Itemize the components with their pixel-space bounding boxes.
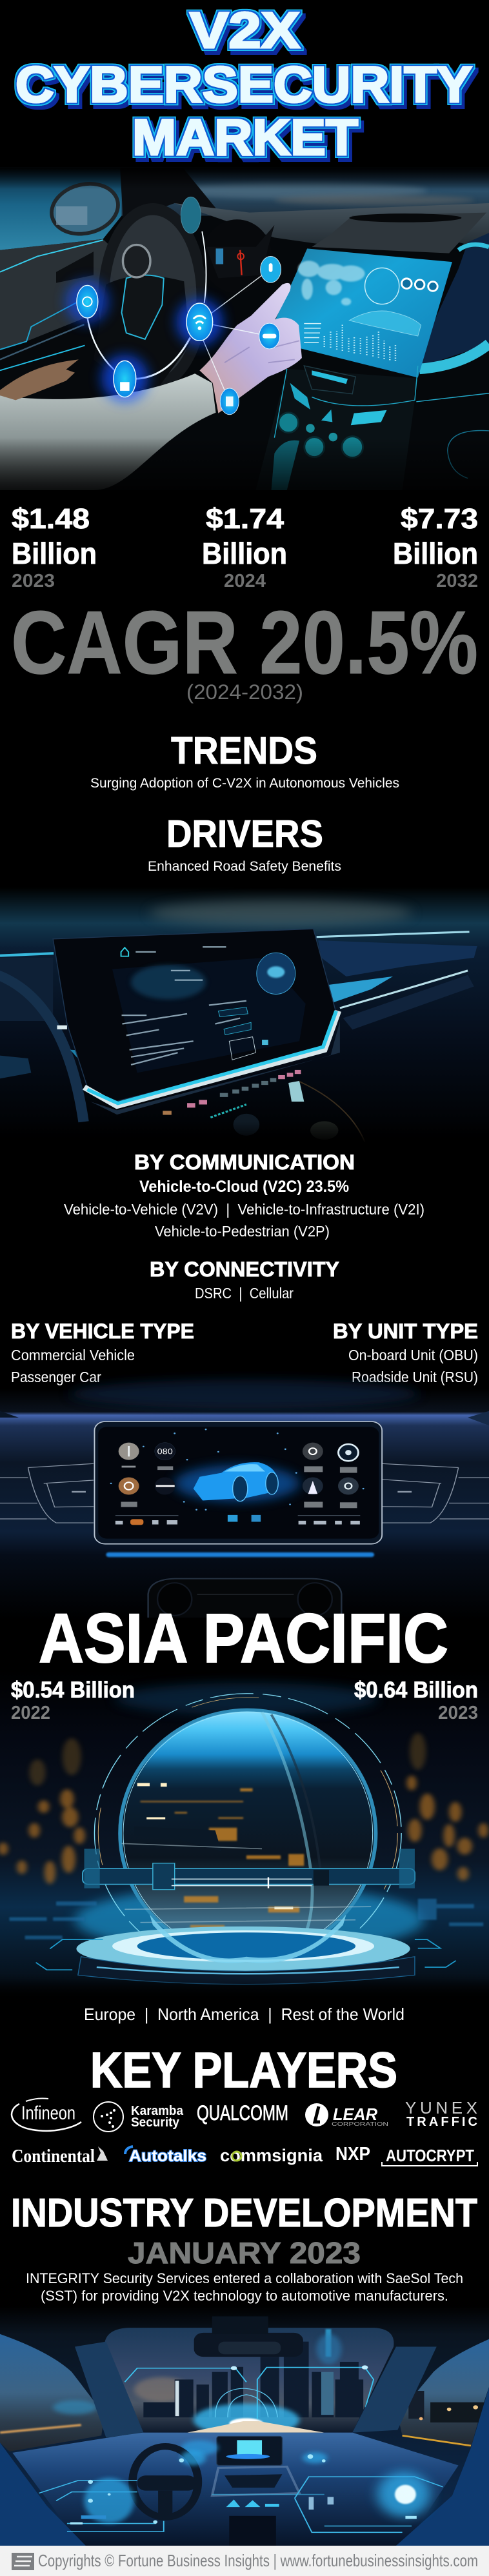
- logo: Yunex Traffic: TRAFFIC: [406, 2115, 477, 2129]
- Asia Pacific value 2022: $0.54 Billion: [11, 1678, 135, 1703]
- hero image: car cockpit with touch screen: [0, 167, 489, 490]
- logo: Infineon: [12, 2098, 81, 2131]
- trends: TRENDS: [171, 729, 317, 772]
- infotainment screen image: [0, 1380, 489, 1620]
- market size stat: 2032: Billion: [393, 537, 478, 570]
- Asia Pacific value 2023: [354, 1678, 478, 1723]
- drivers: [148, 813, 341, 874]
- logos row 2: [12, 2144, 477, 2166]
- logo: Commsignia: commsignia: [220, 2146, 323, 2165]
- development date: JANUARY 2023: [128, 2236, 361, 2270]
- region headline: ASIA PACIFIC: [39, 1599, 448, 1677]
- logo: Yunex Traffic: [405, 2098, 477, 2129]
- market size stat: 2023: $1.48: [12, 503, 90, 535]
- dashboard image with curved display: [0, 887, 489, 1144]
- segment: by unit type: On-board Unit (OBU): [348, 1347, 478, 1363]
- footer logo: [12, 2553, 34, 2570]
- logo: Yunex Traffic: YUNEX: [405, 2098, 477, 2117]
- Asia Pacific value 2023: 2023: [438, 1703, 478, 1723]
- development description: INTEGRITY Security Services entered a collaboration with SaeSol Tech: [26, 2270, 463, 2286]
- drivers: DRIVERS: [166, 813, 323, 855]
- car interior image with city view: [0, 2306, 489, 2546]
- segment: by communication: Vehicle-to-Vehicle (V2V) | Vehicle-to-Infrastructure (V2I): [64, 1201, 424, 1218]
- logos row 1: [12, 2098, 477, 2132]
- drivers: Enhanced Road Safety Benefits: [148, 859, 341, 874]
- market size stat: 2032: $7.73: [401, 503, 478, 535]
- segment: by communication: Vehicle-to-Cloud (V2C) 23.5%: [139, 1178, 349, 1196]
- Asia Pacific value 2023: $0.64 Billion: [354, 1678, 478, 1703]
- logo: Lear Corporation: LEAR: [333, 2105, 377, 2124]
- segment: by connectivity: BY CONNECTIVITY: [150, 1258, 339, 1281]
- network node icons: [66, 197, 281, 415]
- logo: Karamba Security: Security: [131, 2115, 180, 2130]
- logo: Karamba Security: [94, 2102, 184, 2132]
- segment: by connectivity: [150, 1258, 339, 1302]
- logo: Autotalks: Autotalks: [129, 2147, 206, 2165]
- segment: by vehicle type: Commercial Vehicle: [11, 1347, 135, 1363]
- title: MARKET: [132, 108, 358, 166]
- segment: by communication: [64, 1151, 424, 1240]
- other regions: Europe | North America | Rest of the World: [84, 2005, 404, 2024]
- market size stat: 2032: [393, 503, 478, 591]
- development description: [26, 2270, 463, 2304]
- logo: Qualcomm: QUALCOMM: [197, 2101, 288, 2125]
- market size stat: 2024: [202, 503, 287, 591]
- trends: [90, 729, 399, 791]
- segment: by unit type: Roadside Unit (RSU): [352, 1369, 478, 1385]
- logo: Autocrypt: AUTOCRYPT: [386, 2146, 474, 2165]
- Asia Pacific value 2022: 2022: [11, 1703, 50, 1723]
- development description: (SST) for providing V2X technology to automotive manufacturers.: [41, 2288, 448, 2304]
- title: [15, 1, 472, 166]
- key players heading: KEY PLAYERS: [90, 2043, 397, 2098]
- segment: by communication: BY COMMUNICATION: [134, 1151, 355, 1174]
- market size stat: 2032: 2032: [436, 571, 478, 591]
- market size stat: 2024: Billion: [202, 537, 287, 570]
- trends: Surging Adoption of C-V2X in Autonomous Vehicles: [90, 776, 399, 791]
- market size stat: 2023: [12, 503, 97, 591]
- market size stat: 2024: 2024: [224, 571, 266, 591]
- segment: by vehicle type: [11, 1320, 194, 1385]
- region image: glowing globe on platform: [0, 1670, 489, 2000]
- segment: by connectivity: DSRC | Cellular: [195, 1285, 294, 1302]
- footer bar: [0, 2546, 489, 2576]
- logo: Infineon: Infineon: [21, 2103, 75, 2124]
- network arcs: [87, 232, 271, 401]
- infotainment screen image: 080: [157, 1448, 173, 1456]
- market size stat: 2023: Billion: [12, 537, 97, 570]
- segment: by communication: Vehicle-to-Pedestrian (V2P): [155, 1223, 330, 1240]
- market size stat: 2024: $1.74: [206, 503, 284, 535]
- market size stat: 2023: 2023: [12, 571, 55, 591]
- segment: by unit type: [333, 1320, 478, 1385]
- logo: NXP: NXP: [335, 2144, 370, 2165]
- segment: by unit type: BY UNIT TYPE: [333, 1320, 478, 1343]
- title: CYBERSECURITY: [15, 55, 472, 113]
- logo: Continental: Continental: [12, 2146, 95, 2166]
- segment: by vehicle type: BY VEHICLE TYPE: [11, 1320, 194, 1343]
- title: V2X: [190, 1, 300, 59]
- logo: Lear Corporation: [305, 2103, 388, 2127]
- Asia Pacific value 2022: [11, 1678, 135, 1723]
- logo: Karamba Security: Karamba: [131, 2104, 184, 2118]
- logo: Lear Corporation: CORPORATION: [332, 2121, 388, 2127]
- CAGR figure: (2024-2032): [186, 680, 303, 704]
- segment: by vehicle type: Passenger Car: [11, 1369, 101, 1385]
